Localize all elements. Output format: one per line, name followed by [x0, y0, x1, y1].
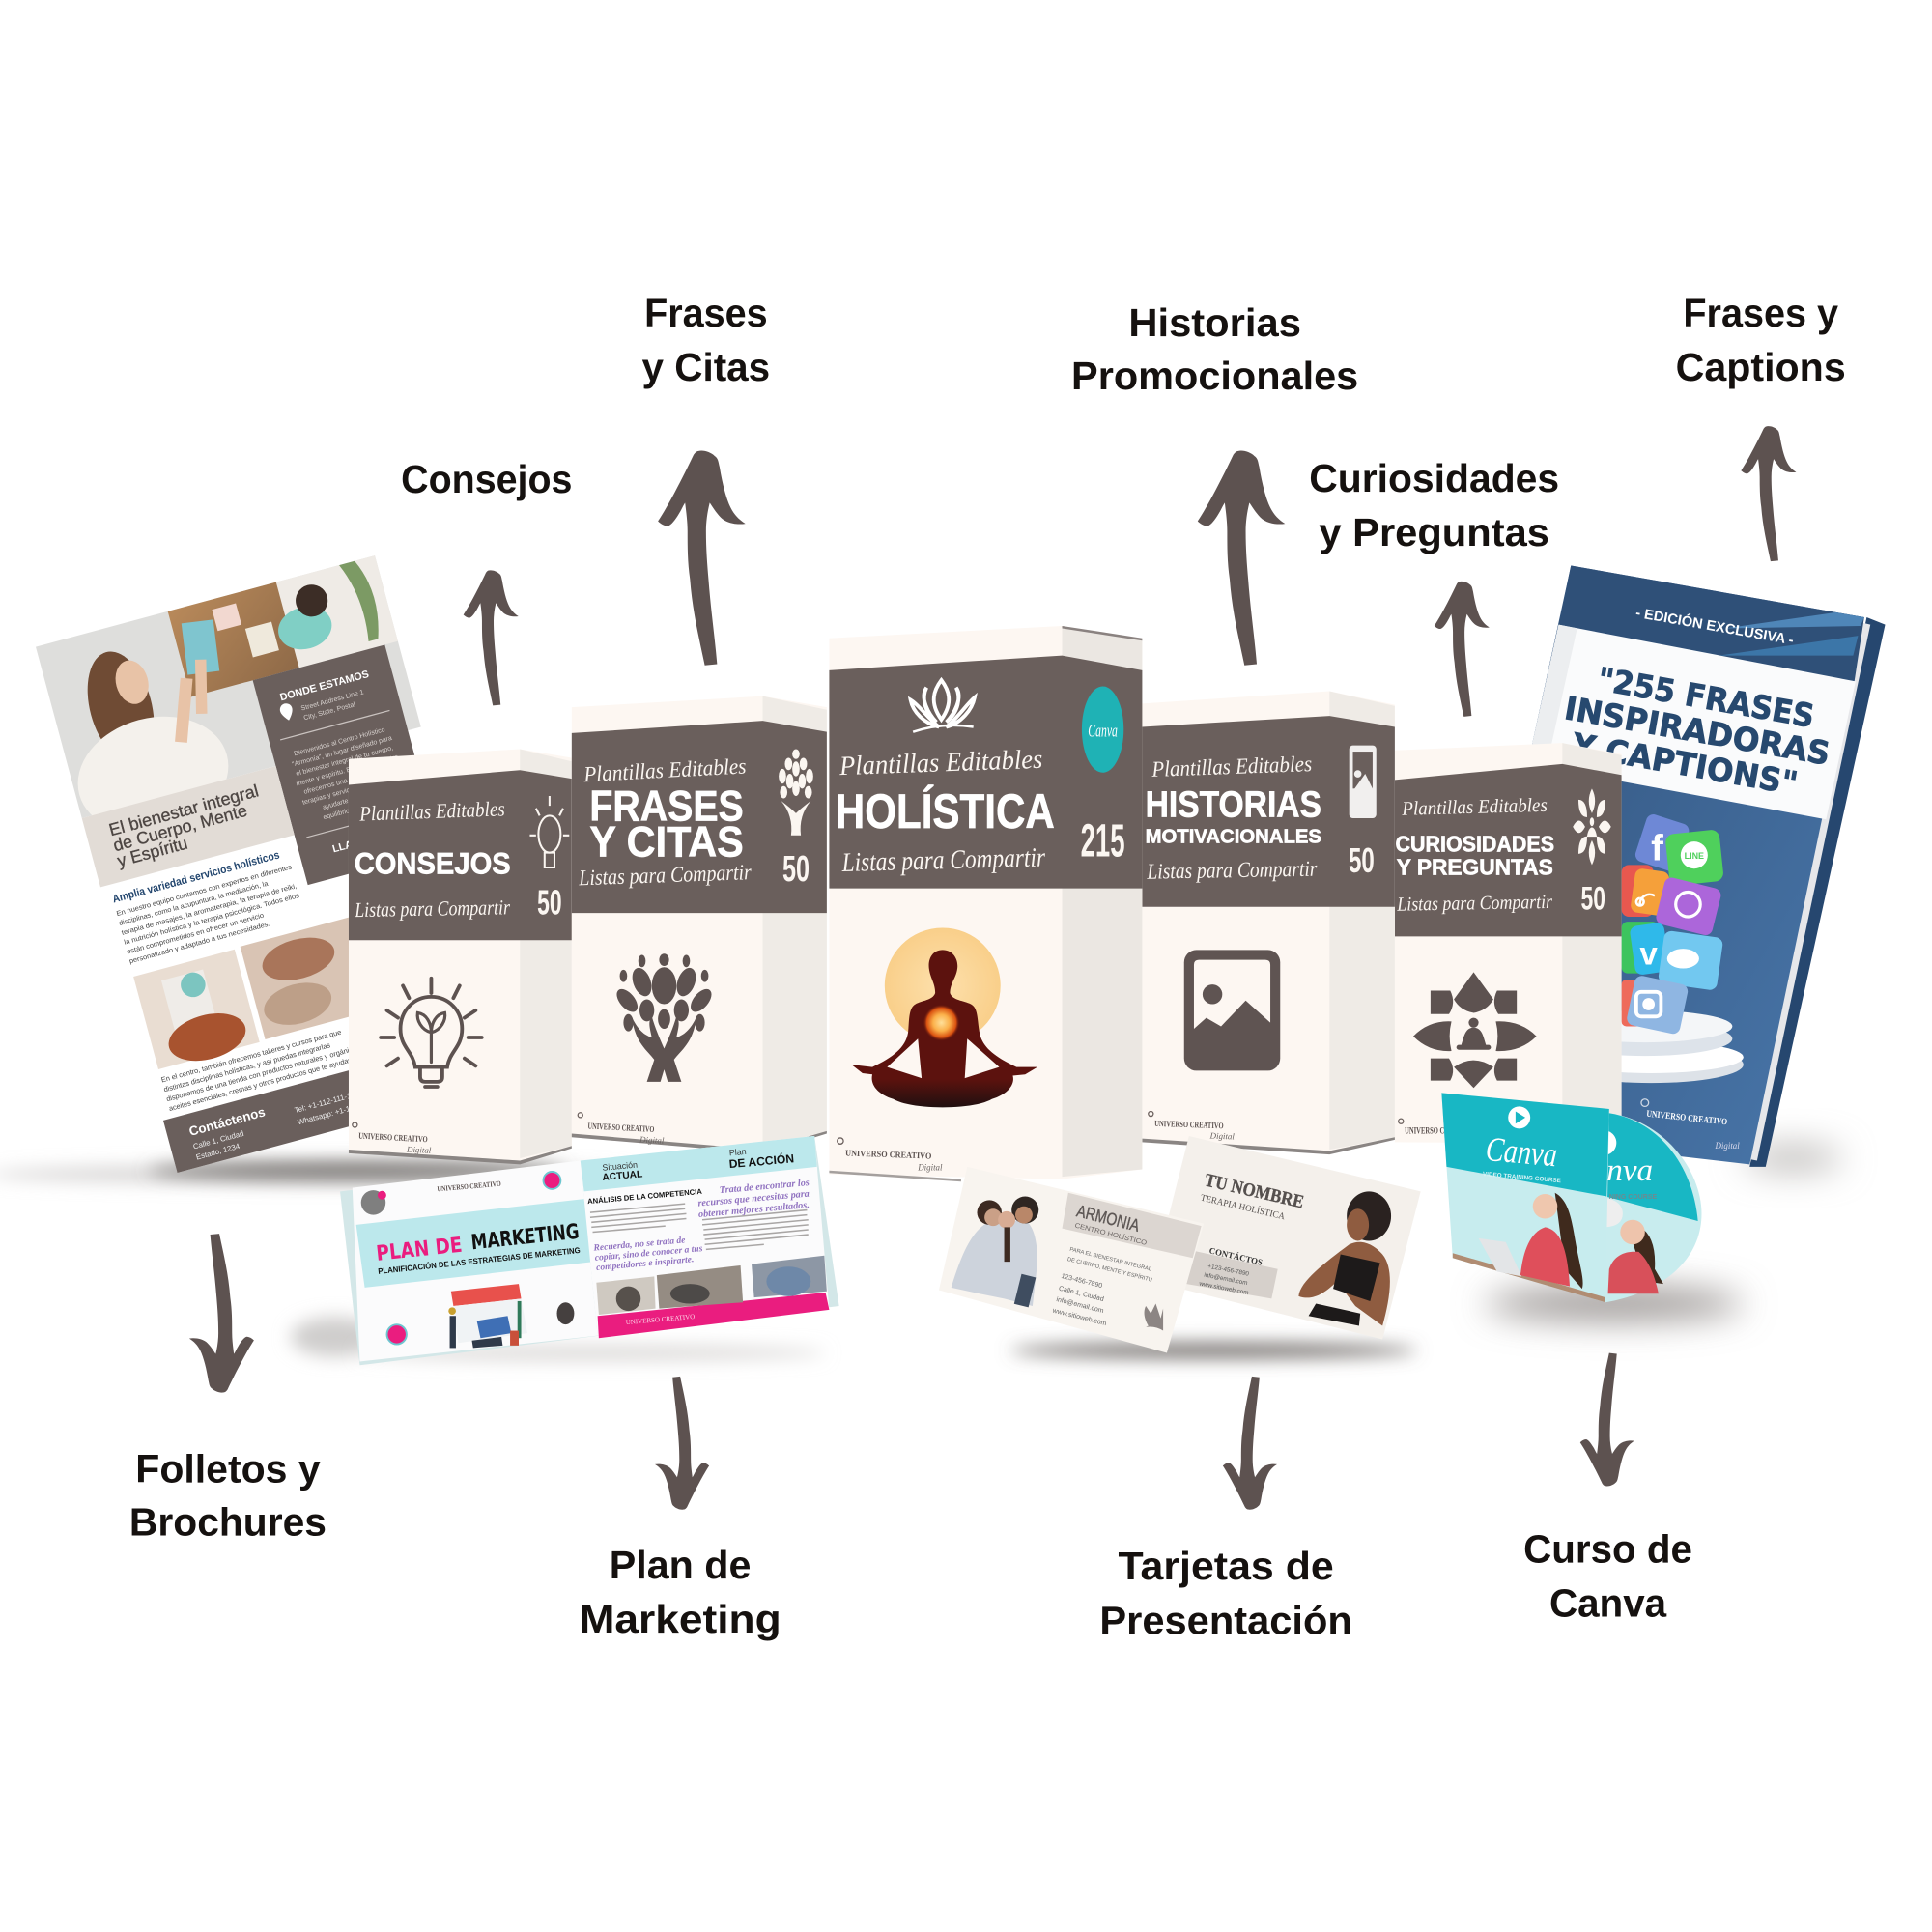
- flyer dark panel: donde estamos: terapias y servicios holísticos para: [301, 773, 403, 807]
- panel: box Frases y Citas: [572, 696, 827, 1153]
- publisher logo: Digital: [406, 1145, 432, 1155]
- label: Curso de Canva: Canva: [1549, 1580, 1666, 1625]
- front card: 123-456-7890: [1061, 1273, 1103, 1290]
- flyer dark panel: donde estamos: "Armonía", un lugar diseñado para: [292, 735, 393, 768]
- flyer footer: Calle 1, Ciudad: [192, 1129, 244, 1151]
- front card: info@email.com: [1056, 1296, 1104, 1315]
- flyer dark panel: donde estamos: mente y espíritu. En nuestro centro: [296, 753, 399, 787]
- label: Frases y Citas: Frases: [644, 291, 768, 335]
- book publisher logo: [1641, 1099, 1740, 1151]
- woman photo: [1298, 1191, 1391, 1325]
- panel: ebook 255 frases: [1528, 565, 1886, 1167]
- back card: +123-456-7890: [1208, 1264, 1250, 1278]
- left page: PLAN DE: [375, 1234, 464, 1266]
- right page: Plan: [728, 1147, 747, 1157]
- panel: box Consejos: [349, 750, 572, 1164]
- publisher logo: [578, 1113, 665, 1146]
- arrow: to Historias Promocionales: [1198, 451, 1285, 666]
- social media cubes: f: [1651, 827, 1663, 868]
- right page: Recuerda, no se trata de: [592, 1235, 687, 1254]
- flyer dark panel: donde estamos: DONDE ESTAMOS: [279, 668, 370, 703]
- side icon: small flower: [1573, 788, 1611, 865]
- label: Tarjetas de Presentación: Presentación: [1099, 1598, 1352, 1642]
- right page: competidores e inspirarte.: [596, 1254, 695, 1273]
- flyer footer: Estado, 1234: [195, 1142, 242, 1162]
- label: Tarjetas de Presentación: Tarjetas de: [1119, 1544, 1334, 1588]
- canva badge: Canva: [1088, 722, 1118, 742]
- flyer body text: [111, 847, 306, 965]
- sun and meditating silhouette: [851, 927, 1037, 1107]
- book title: [1562, 660, 1833, 803]
- side icon: small bulb: [529, 796, 569, 867]
- box text: Plantillas Editables: [1401, 795, 1548, 820]
- panel: brochure Plan de Marketing: [340, 1136, 839, 1365]
- box text: Listas para Compartir: [578, 860, 752, 890]
- flyer heading: de Cuerpo, Mente: [111, 801, 249, 855]
- back card: TERAPIA HOLÍSTICA: [1200, 1192, 1286, 1222]
- front card: Calle 1, Ciudad: [1058, 1286, 1104, 1303]
- book title: Y CAPTIONS": [1569, 725, 1801, 803]
- arrow: to Frases y Captions: [1741, 426, 1796, 561]
- publisher logo: Digital: [1208, 1131, 1236, 1141]
- flyer main photo: [36, 555, 430, 850]
- box text: 50: [1580, 880, 1605, 917]
- box text: [578, 753, 810, 890]
- box text: [1396, 795, 1605, 917]
- label: Historias Promocionales: Historias: [1128, 300, 1301, 345]
- publisher logo: [1399, 1119, 1474, 1135]
- flyer footer: Tel: +1-112-111-112: [294, 1090, 359, 1115]
- flyer closing text: disponemos de una tienda con productos naturales y orgánicos: [165, 1043, 361, 1103]
- canva badge: [1082, 686, 1123, 773]
- flyer heading: y Espíritu: [115, 834, 189, 870]
- right page: copiar, sino de conocer a tus: [594, 1243, 703, 1264]
- label: Folletos y Brochures: Brochures: [129, 1499, 327, 1544]
- front icon: light bulb: [381, 979, 482, 1087]
- box text: Listas para Compartir: [1396, 892, 1552, 916]
- flyer dark panel: donde estamos: ayudarte a alcanzar el: [322, 787, 388, 811]
- arrow: to Frases y Citas: [658, 451, 746, 666]
- label: Tarjetas de Presentación: [1099, 1544, 1352, 1642]
- flyer body text: terapia de masajes, la aromaterapia, la terapia de reiki,: [121, 882, 298, 937]
- flyer footer: Whatsapp: +1-112-111: [297, 1098, 372, 1126]
- right page: DE ACCIÓN: [728, 1151, 795, 1171]
- meeting photos: [596, 1256, 827, 1315]
- flyer dark panel: donde estamos: [253, 644, 440, 885]
- publisher logo: [1149, 1112, 1236, 1141]
- box text: Listas para Compartir: [840, 842, 1045, 878]
- box text: [836, 745, 1055, 878]
- label: Curiosidades y Preguntas: y Preguntas: [1319, 510, 1549, 554]
- flyer dark panel: donde estamos: ofrecemos una amplia gama de: [303, 765, 396, 796]
- publisher logo: Digital: [917, 1163, 943, 1173]
- women photo: [952, 1197, 1038, 1307]
- social media cubes: LINE: [1685, 851, 1704, 861]
- arrow: to Curiosidades y Preguntas: [1435, 582, 1490, 717]
- left page: [353, 1161, 598, 1361]
- flyer body text: están comprometidos en ofrecer un servicio: [126, 912, 265, 955]
- front card: PARA EL BIENESTAR INTEGRAL: [1069, 1247, 1151, 1273]
- back card: CONTÁCTOS: [1208, 1245, 1264, 1267]
- panel: main box Holística: [829, 626, 1142, 1181]
- flyer dark panel: donde estamos: City, State, Postal: [303, 701, 356, 722]
- right page: recursos que necesitas para: [697, 1189, 810, 1209]
- front card: www.sitioweb.com: [1051, 1307, 1107, 1327]
- flyer body text: En nuestro equipo contamos con expertos en diferentes: [116, 863, 293, 918]
- flyer footer: [163, 1029, 517, 1173]
- right page: UNIVERSO CREATIVO: [625, 1313, 696, 1326]
- label: Frases y Captions: Frases y: [1683, 291, 1838, 335]
- flyer heading: [82, 766, 295, 887]
- arrow: to Folletos y Brochures: [189, 1234, 254, 1393]
- box text: Listas para Compartir: [1146, 857, 1318, 884]
- number 215: 215: [1081, 814, 1125, 867]
- flyer closing text: [160, 1024, 363, 1113]
- label: Folletos y Brochures: [129, 1446, 327, 1544]
- ground shadow: flyer, boxes, brochure, cards, disc, book: [0, 1146, 1842, 1360]
- right page: ACTUAL: [602, 1169, 643, 1183]
- publisher logo: UNIVERSO CREATIVO: [358, 1131, 428, 1144]
- back card: www.sitioweb.com: [1198, 1280, 1249, 1296]
- back card: info@email.com: [1204, 1272, 1248, 1287]
- flyer dark panel: donde estamos: Street Address Line 1: [300, 689, 365, 712]
- disc: NING COURSE: [1609, 1194, 1658, 1201]
- left page: MARKETING: [470, 1220, 581, 1255]
- flyer body text: Amplia variedad servicios holísticos: [111, 849, 281, 905]
- label: Frases y Citas: [642, 291, 770, 389]
- label: Consejos: Consejos: [401, 457, 572, 501]
- publisher logo: [353, 1122, 432, 1155]
- box text: HOLÍSTICA: [836, 784, 1055, 838]
- box text: HISTORIAS: [1146, 784, 1321, 826]
- box text: 50: [782, 848, 810, 890]
- box text: 50: [537, 883, 562, 922]
- box text: Y CITAS: [589, 818, 744, 866]
- flyer body text: disciplinas, como la acupuntura, la meditación, la: [118, 880, 269, 927]
- publisher logo: [838, 1138, 943, 1173]
- panel: box Curiosidades y Preguntas: [1395, 743, 1622, 1144]
- right page: Trata de encontrar los: [719, 1178, 810, 1196]
- panel: flyer brochure: [36, 555, 517, 1173]
- flyer dark panel: donde estamos: equilibrio que necesitas: [323, 796, 393, 821]
- book title: "255 FRASES: [1595, 660, 1817, 735]
- front icon: picture: [1184, 950, 1280, 1070]
- label: Plan de Marketing: [579, 1543, 781, 1641]
- label: Frases y Captions: [1676, 291, 1846, 389]
- left page: UNIVERSO CREATIVO: [437, 1179, 501, 1193]
- front card: ARMONIA: [1075, 1201, 1142, 1236]
- label: Curiosidades y Preguntas: Curiosidades: [1309, 456, 1559, 500]
- publisher logo: UNIVERSO CREATIVO: [1154, 1119, 1224, 1130]
- arrow: to Consejos: [464, 570, 519, 705]
- box text: [354, 797, 562, 922]
- book title: INSPIRADORAS: [1562, 689, 1833, 773]
- box text: Plantillas Editables: [582, 753, 747, 786]
- side icon: small tree: [779, 750, 813, 836]
- label: Historias Promocionales: Promocionales: [1071, 354, 1358, 398]
- panel: box Historias Motivacionales: [1142, 692, 1395, 1154]
- flyer dark panel: donde estamos: Bienvenidos al Centro Holístico: [294, 726, 385, 757]
- label: Folletos y Brochures: Folletos y: [135, 1446, 321, 1491]
- right page: obtener mejores resultados.: [698, 1200, 810, 1220]
- box text: [1146, 752, 1375, 884]
- flyer photos: [133, 917, 376, 1073]
- book pedestal: [1557, 1010, 1744, 1083]
- label: Plan de Marketing: Marketing: [579, 1597, 781, 1641]
- social media cubes: v: [1639, 937, 1658, 973]
- front icon: tree with hands: [612, 953, 716, 1082]
- box text: Y PREGUNTAS: [1397, 855, 1553, 880]
- book publisher logo: Digital: [1715, 1141, 1740, 1151]
- arrow: to Tarjetas de Presentación: [1223, 1377, 1277, 1510]
- label: Curso de Canva: Curso de: [1523, 1526, 1692, 1571]
- case: Canva: [1484, 1129, 1559, 1174]
- back card: TU NOMBRE: [1203, 1170, 1306, 1212]
- box text: MOTIVACIONALES: [1146, 826, 1321, 847]
- right page: ANÁLISIS DE LA COMPETENCIA: [587, 1187, 703, 1206]
- publisher logo: UNIVERSO CREATIVO: [1405, 1125, 1474, 1135]
- label: Historias Promocionales: [1071, 300, 1358, 398]
- flyer heading: El bienestar integral: [107, 781, 261, 839]
- lotus logo: [911, 680, 975, 732]
- back card: [1152, 1136, 1421, 1339]
- side icon: small image: [1350, 746, 1377, 818]
- box text: Plantillas Editables: [1151, 752, 1313, 781]
- box text: CONSEJOS: [355, 845, 511, 880]
- box text: 50: [1349, 841, 1375, 880]
- flyer dark panel: donde estamos: LLAMA: [331, 835, 370, 855]
- arrow: to Plan de Marketing: [655, 1377, 709, 1510]
- panel: business cards: [939, 1136, 1421, 1353]
- label: Plan de Marketing: Plan de: [610, 1543, 751, 1587]
- social media cubes: [1622, 812, 1724, 1036]
- left page: PLANIFICACIÓN DE LAS ESTRATEGIAS DE MARKETING: [378, 1244, 581, 1276]
- front card: DE CUERPO, MENTE Y ESPÍRITU: [1066, 1256, 1152, 1284]
- disc: nva: [1606, 1152, 1653, 1188]
- case: VIDEO TRAINING COURSE: [1483, 1171, 1561, 1184]
- book publisher logo: UNIVERSO CREATIVO: [1646, 1109, 1728, 1127]
- label: Frases y Citas: y Citas: [642, 345, 770, 389]
- front card: [939, 1167, 1204, 1353]
- publisher logo: Digital: [639, 1134, 665, 1146]
- flyer closing text: distintas disciplinas holísticas, y así puedas integrarlas: [162, 1040, 331, 1094]
- box text: Plantillas Editables: [838, 745, 1043, 781]
- box text: Listas para Compartir: [354, 895, 511, 922]
- flyer closing text: En el centro, también ofrecemos talleres y cursos para que: [160, 1028, 342, 1084]
- calendar illustration: [448, 1284, 527, 1348]
- box text: Plantillas Editables: [358, 797, 505, 826]
- label: Frases y Captions: Captions: [1676, 345, 1846, 389]
- front icon: lotus flower: [1413, 972, 1537, 1088]
- case: [1441, 1093, 1609, 1302]
- flyer body text: personalizado y adaptado a tus necesidades.: [128, 920, 270, 965]
- label: Curiosidades y Preguntas: [1309, 456, 1559, 554]
- publisher logo: UNIVERSO CREATIVO: [587, 1121, 655, 1134]
- panel: Canva course CD: [1441, 1093, 1701, 1302]
- arrow: to Curso de Canva: [1580, 1353, 1634, 1486]
- disc: [1605, 1113, 1701, 1302]
- label: Curso de Canva: [1523, 1526, 1692, 1625]
- flyer dark panel: donde estamos: el bienestar integral de tu cuerpo,: [296, 745, 394, 778]
- right page: [581, 1136, 829, 1338]
- flyer body text: la nutrición holística y la terapia psicológica. Todos ellos: [124, 892, 300, 947]
- flyer closing text: aceites esenciales, cremas y otros productos que te ayudarán: [168, 1054, 359, 1113]
- box text: CURIOSIDADES: [1396, 831, 1554, 856]
- front card: CENTRO HOLÍSTICO: [1074, 1221, 1149, 1247]
- right page: Situación: [602, 1160, 638, 1173]
- flyer footer: Contáctenos: [187, 1104, 267, 1139]
- box text: FRASES: [589, 782, 744, 830]
- publisher logo: UNIVERSO CREATIVO: [845, 1148, 932, 1161]
- book edition line: - EDICIÓN EXCLUSIVA -: [1634, 604, 1795, 648]
